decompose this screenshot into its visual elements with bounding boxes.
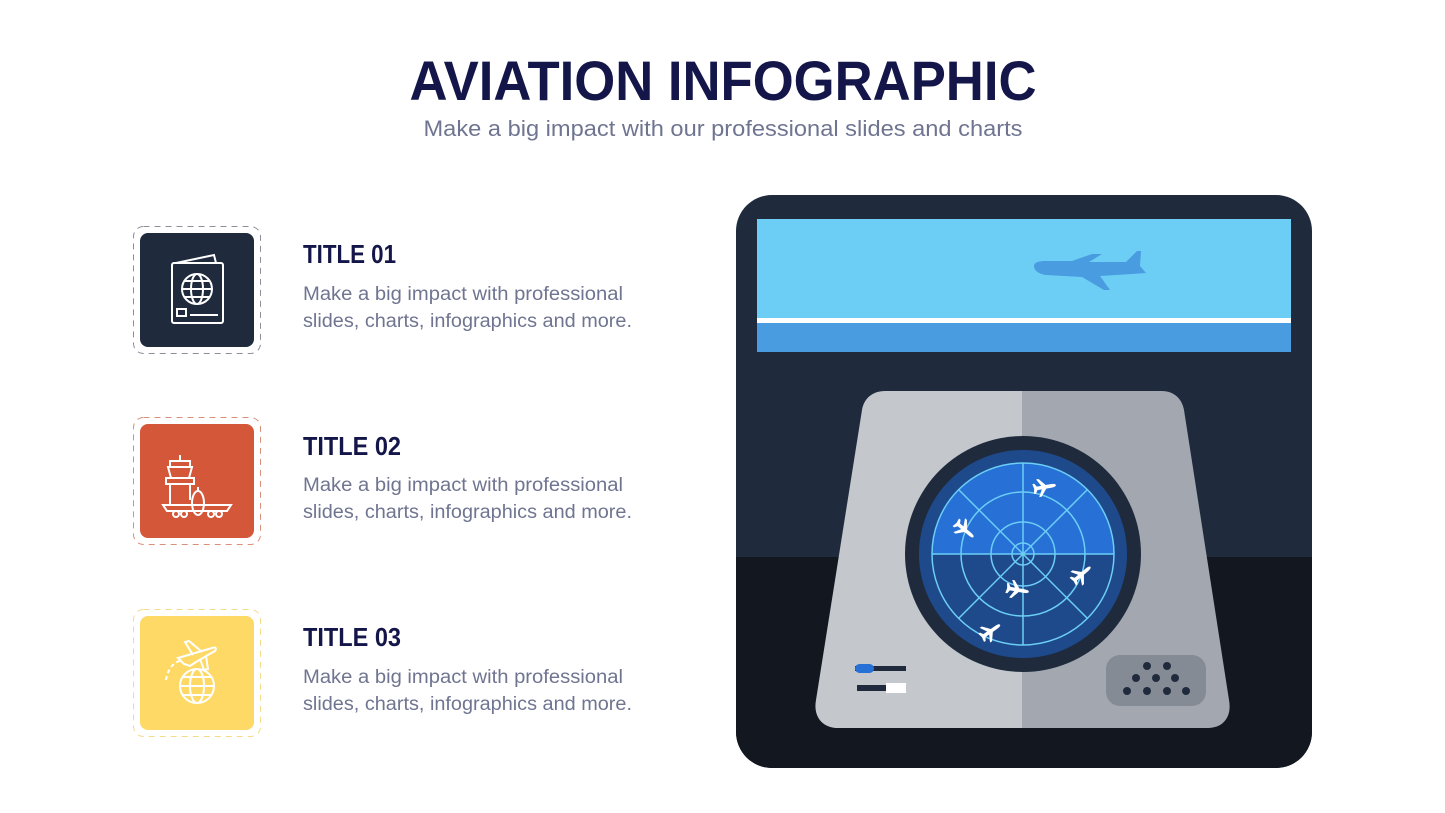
sliders [855,664,906,693]
title: AVIATION INFOGRAPHIC [410,49,1036,112]
body 2 [303,475,632,523]
heading 2: TITLE 02 [303,431,401,461]
item 2 [134,418,632,544]
item 3 [134,610,632,736]
window with airplane [757,219,1291,352]
heading 3: TITLE 03 [303,622,401,652]
monitor body [815,391,1230,728]
body 1: Make a big impact with professional [303,284,623,305]
body 3: slides, charts, infographics and more. [303,694,632,715]
item 1 [134,226,632,354]
body 2: Make a big impact with professional [303,475,623,496]
speaker grille [1106,655,1206,706]
icon: control tower [134,418,260,544]
icon: passport [134,226,260,354]
body 1 [303,284,632,332]
body 3: Make a big impact with professional [303,667,623,688]
body 1: slides, charts, infographics and more. [303,311,632,332]
icon: globe flight [134,610,260,736]
body 2: slides, charts, infographics and more. [303,502,632,523]
body 3 [303,667,632,715]
subtitle: Make a big impact with our professional slides and charts [424,116,1022,141]
radar screen [905,436,1141,672]
heading 1: TITLE 01 [303,239,396,269]
illustration: radar console [736,195,1312,768]
